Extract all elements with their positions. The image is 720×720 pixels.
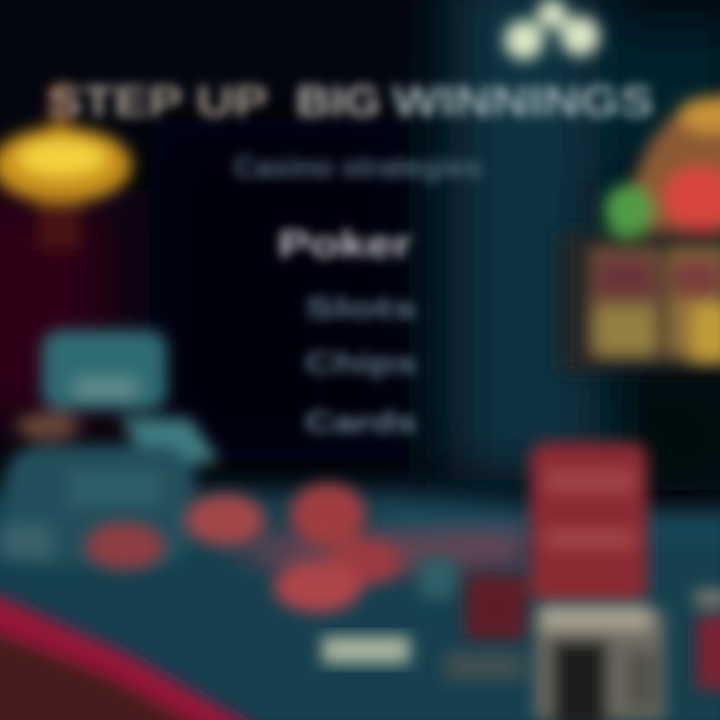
title: STEP UP — [48, 77, 268, 126]
glass jar with chips — [0, 330, 220, 565]
title: BIG — [296, 77, 381, 126]
menu heading: Poker — [278, 224, 412, 266]
menu list — [278, 224, 417, 439]
menu item 2: Chips — [305, 347, 417, 380]
subtitle: Casino strategies — [234, 151, 482, 184]
title: WINNINGS — [392, 77, 654, 126]
icon: chandelier light — [0, 85, 132, 250]
slot machine — [560, 95, 720, 372]
red chip stack — [465, 442, 648, 640]
playing card — [322, 636, 410, 664]
menu item 3: Cards — [305, 406, 417, 439]
icon: top emblem — [504, 0, 600, 60]
table rail: crimson edge — [0, 590, 260, 720]
dice and cards: foreground — [445, 590, 720, 720]
card table surface — [0, 490, 720, 720]
menu item 1: Slots — [305, 292, 417, 325]
red chips: scattered — [85, 483, 456, 613]
title — [48, 77, 654, 126]
